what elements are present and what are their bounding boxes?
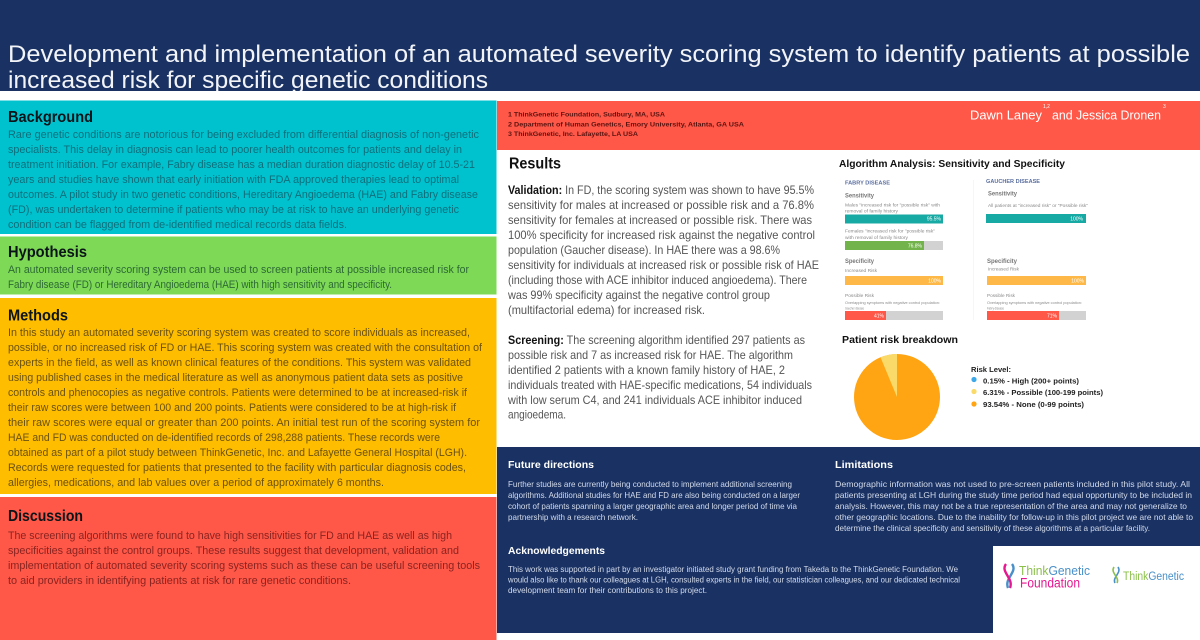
methods text: allergies, medications, and lab values over a period of approximately 6 months.	[8, 477, 384, 489]
discussion text: implementation of automated severity scoring systems such as these can be useful screening tools	[8, 560, 480, 572]
affiliations: 1 ThinkGenetic Foundation, Sudbury, MA, USA	[508, 112, 665, 118]
chart: fabry disease: with removal of family history	[845, 235, 909, 241]
chart: fabry disease: FABRY DISEASE	[845, 180, 890, 186]
background text: condition can be flagged from de-identified medical records data fields.	[8, 219, 347, 231]
logo: ThinkGenetic Foundation	[1004, 563, 1090, 590]
chart: gaucher disease: Overlapping symptoms with negative control population:	[987, 300, 1082, 305]
panel: results	[507, 156, 819, 422]
bar: increased risk 100%	[987, 276, 1086, 285]
screening paragraph: angioedema.	[508, 408, 566, 422]
bar: all patients 100%	[986, 214, 1086, 223]
affiliations: 2 Department of Human Genetics, Emory University, Atlanta, GA USA	[508, 122, 744, 128]
background text: Rare genetic conditions are notorious for being excluded from differential diagnosis of non-genetic	[8, 129, 479, 141]
future directions: algorithms. Additional studies for HAE and FD are also being conducted on a larger	[508, 490, 800, 500]
acknowledgements: would also like to thank our colleagues at LGH, consulted experts in the field, our statistician colleagues, and our dedicated technical	[507, 576, 960, 584]
future directions	[508, 459, 800, 522]
background text: treatment initiation. For example, Fabry disease has a median duration diagnostic delay of 10.5-21	[8, 159, 475, 171]
screening paragraph: Screening: The screening algorithm identified 297 patients as	[508, 333, 805, 347]
authors: Dawn Laney	[970, 108, 1042, 122]
chart: gaucher disease	[973, 179, 1088, 320]
background text: outcomes. A pilot study in two genetic conditions, Hereditary Angioedema (HAE) and Fabry disease	[8, 189, 478, 201]
validation paragraph	[507, 183, 819, 317]
background text	[8, 129, 479, 231]
legend: risk level: 0.15% - High (200+ points)	[983, 376, 1080, 386]
chart: fabry disease	[845, 180, 943, 320]
heading: results: Results	[509, 156, 561, 172]
methods text: experts in the field, as well as known clinical features of the conditions. This system was validated	[8, 357, 471, 369]
future directions: cohort of patients spanning a larger geographic area and longer period of time via	[508, 501, 797, 511]
logo: ThinkGenetic	[1113, 567, 1184, 583]
heading: methods: Methods	[8, 308, 68, 324]
limitations	[835, 459, 1193, 533]
bar: possible risk 71%: 71%	[1047, 314, 1058, 320]
validation paragraph: sensitivity for individuals at increased risk or possible risk of HAE	[508, 258, 819, 272]
authors: 3	[1163, 104, 1166, 110]
bar: possible risk 71%	[987, 311, 1086, 320]
heading: algorithm analysis: Algorithm Analysis: Sensitivity and Specificity	[839, 158, 1065, 170]
pie chart: patient risk	[854, 354, 940, 440]
methods text	[8, 327, 483, 489]
future directions: Further studies are currently being conducted to implement additional screening	[508, 479, 792, 489]
background text: (FD), was undertaken to determine if patients who may be at risk to have an underlying genetic	[8, 204, 459, 216]
limitations: Demographic information was not used to pre-screen patients included in this pilot study. All	[835, 479, 1190, 489]
icon: dna helix	[1004, 564, 1014, 588]
methods text: HAE and FD was conducted on de-identified records of 298,288 patients. These records were	[8, 432, 440, 444]
discussion text	[8, 530, 480, 587]
chart: fabry disease: Increased Risk	[845, 268, 878, 274]
limitations: other geographic locations. Due to the inability for follow-up in this pilot project we are not able to	[835, 512, 1193, 522]
methods text: In this study an automated severity scoring system was created to score individuals as increased,	[8, 327, 470, 339]
legend: risk level	[971, 365, 1104, 409]
bar: males 95.5%: 95.5%	[927, 217, 942, 223]
bar: possible risk 41%: 41%	[874, 314, 885, 320]
chart: fabry disease: Gaucher disease	[845, 306, 864, 310]
acknowledgements: This work was supported in part by an investigator initiated study grant funding from Takeda to the ThinkGenetic Foundation. We	[508, 565, 959, 574]
chart: gaucher disease: Specificity	[987, 259, 1018, 265]
chart: fabry disease: Possible Risk	[845, 293, 875, 299]
chart: fabry disease: Sensitivity	[845, 194, 875, 200]
future directions: Future directions	[508, 459, 594, 471]
title banner: increased risk for specific genetic conditions	[8, 67, 488, 94]
authors: and Jessica Dronen	[1052, 108, 1161, 122]
bar: all patients 100%: 100%	[1070, 216, 1084, 222]
background text: years and studies have shown that early initiation with FDA approved therapies lead to optimal	[8, 174, 459, 186]
bar: increased risk 100%: 100%	[928, 278, 942, 284]
screening paragraph: with low serum C4, and 241 individuals ACE inhibitor induced	[507, 393, 802, 407]
authors: 1,2	[1043, 104, 1050, 110]
bar: increased risk 100%: 100%	[1071, 278, 1085, 284]
chart: gaucher disease: GAUCHER DISEASE	[986, 179, 1040, 185]
validation paragraph: (including those with ACE inhibitor induced angioedema). There	[508, 273, 807, 287]
methods text: obtained as part of a pilot study between ThinkGenetic, Inc. and Lafayette General Hospital (LGH).	[8, 447, 467, 459]
limitations: patients presenting at LGH during the study time period had equal opportunity to be included in	[835, 490, 1192, 500]
title banner: Development and implementation of an automated severity scoring system to identify patients at possible	[8, 41, 1190, 68]
validation paragraph: Validation: In FD, the scoring system was shown to have 95.5%	[508, 183, 814, 197]
affiliations	[508, 112, 744, 138]
screening paragraph	[507, 333, 812, 422]
validation paragraph: sensitivity for females at increased or possible risk. There was	[508, 213, 812, 227]
heading: patient risk breakdown: Patient risk breakdown	[842, 335, 958, 346]
chart: gaucher disease: All patients at "increased risk" or "Possible risk"	[988, 203, 1088, 209]
validation paragraph: population (Gaucher disease). In HAE there was a 98.6%	[508, 243, 780, 257]
limitations: determine the clinical specificity and sensitivity of these algorithms at a particular facility.	[835, 523, 1150, 533]
chart: gaucher disease: Possible Risk	[987, 293, 1016, 299]
future directions: partnership with a research network.	[508, 512, 638, 522]
validation paragraph: (multifactorial edema) for increased risk.	[508, 303, 705, 317]
heading: background: Background	[8, 109, 93, 126]
hypothesis text: An automated severity scoring system can be used to screen patients at possible increased risk for	[8, 264, 469, 276]
acknowledgements: Acknowledgements	[508, 545, 605, 557]
chart: fabry disease: removal of family history	[845, 208, 899, 214]
methods text: their raw scores were between 100 and 200 points. Patients were considered to be at high-risk if	[8, 402, 457, 414]
panel: background	[0, 100, 496, 234]
authors	[970, 104, 1166, 122]
acknowledgements	[507, 545, 960, 595]
heading: discussion: Discussion	[8, 508, 83, 525]
discussion text: The screening algorithms were found to have high sensitivities for FD and HAE as well as high	[8, 530, 452, 542]
screening paragraph: identified 2 patients with a known family history of HAE, 2	[508, 363, 785, 377]
panel: navy footer	[497, 447, 1200, 633]
discussion text: specificities against the control groups. These results suggest that development, validation and	[8, 545, 459, 557]
validation paragraph: was 99% specificity against the negative control group	[507, 288, 770, 302]
panel: methods	[0, 298, 496, 494]
chart: fabry disease: Males "increased risk for "possible risk" with	[845, 202, 940, 208]
heading: hypothesis: Hypothesis	[8, 244, 87, 261]
logo: ThinkGenetic Foundation: Foundation	[1020, 576, 1080, 590]
chart: gaucher disease: Sensitivity	[988, 192, 1018, 198]
logo: ThinkGenetic: ThinkGenetic	[1123, 571, 1184, 583]
methods text: using published cases in the medical literature as well as anonymous patient data sets as positive	[8, 372, 463, 384]
screening paragraph: possible risk and 7 as increased risk for HAE. The algorithm	[508, 348, 793, 362]
affiliations: 3 ThinkGenetic, Inc. Lafayette, LA USA	[508, 131, 638, 138]
chart: fabry disease: Females "increased risk for "possible risk"	[845, 228, 935, 234]
methods text: their raw scores were equal or greater than 200 points. An initial test run of the scoring system for	[8, 417, 480, 429]
chart: fabry disease: Specificity	[845, 259, 875, 265]
chart: gaucher disease: Increased Risk	[988, 266, 1020, 272]
logo: ThinkGenetic Foundation: ThinkGenetic	[1019, 563, 1090, 578]
legend: risk level: 93.54% - None (0-99 points)	[983, 400, 1085, 409]
legend: risk level: 6.31% - Possible (100-199 points)	[983, 388, 1104, 397]
authors banner	[497, 101, 1200, 150]
icon: small dna helix	[1113, 567, 1119, 583]
panel: hypothesis	[0, 236, 496, 294]
hypothesis text: Fabry disease (FD) or Hereditary Angioedema (HAE) with high sensitivity and specificity.	[8, 279, 392, 291]
legend: risk level: Risk Level:	[971, 365, 1011, 374]
panel: discussion	[0, 497, 496, 640]
methods text: Records were requested for patients that presented to the facility with particular diagnosis codes,	[8, 462, 466, 474]
hypothesis text	[8, 264, 469, 291]
methods text: controls and phenocopies as negative controls. Patients were determined to be at increased-risk if	[8, 387, 468, 399]
title banner	[0, 0, 1200, 94]
validation paragraph: 100% specificity for increased risk against the negative control	[508, 228, 815, 242]
limitations: analysis. However, this may not be a true representation of the area and may not generalize to	[835, 501, 1187, 511]
validation paragraph: sensitivity for males at increased or possible risk and a 76.8%	[508, 198, 814, 212]
chart: fabry disease: Overlapping symptoms with negative control population:	[845, 300, 940, 305]
screening paragraph: individuals treated with HAE-specific medications, 54 individuals	[508, 378, 812, 392]
acknowledgements: development team for their contributions to this project.	[508, 586, 707, 595]
background text: specialists. This delay in diagnosis can lead to poorer health outcomes for patients and delay in	[8, 144, 462, 156]
limitations: Limitations	[835, 459, 893, 471]
chart: gaucher disease: Fabry disease	[987, 306, 1004, 310]
discussion text: to aid providers in identifying patients at risk for rare genetic conditions.	[8, 575, 351, 587]
bar: females 76.8%: 76.8%	[908, 244, 923, 250]
methods text: possible, or no increased risk of FD or HAE. This scoring system was created with the consultation of	[8, 342, 483, 354]
